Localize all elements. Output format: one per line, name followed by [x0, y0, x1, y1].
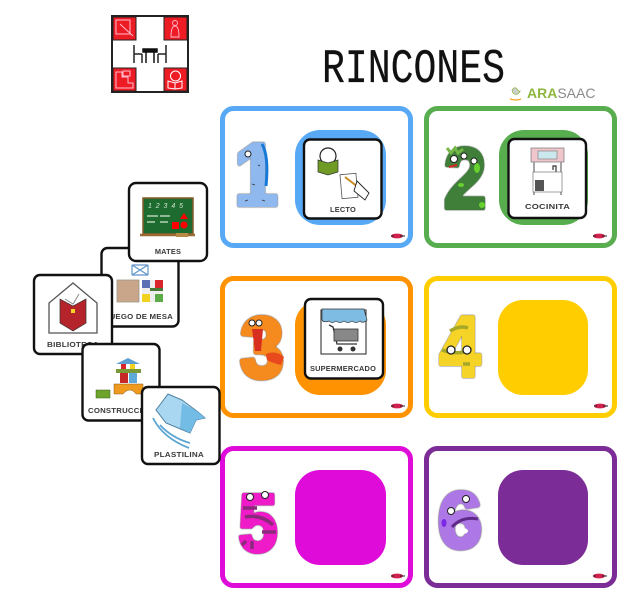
picto: mates: MATES: [155, 247, 181, 256]
picto: lecto: [304, 140, 382, 218]
logo: corner activity icons with table: [112, 16, 188, 92]
mini logo: [593, 574, 607, 578]
panel 6: purple: [426, 448, 614, 586]
title: RINCONES: [322, 43, 505, 97]
picto: juego de mesa: JUEGO DE MESA: [105, 312, 173, 321]
number 3 monster: 3: [240, 301, 284, 396]
panel 5: magenta: [222, 448, 410, 586]
picto: construccion: [82, 344, 160, 420]
picto: cocinita: COCINITA: [525, 202, 571, 211]
picto: plastilina: [142, 387, 220, 464]
mini logo: [391, 234, 405, 238]
picto: cocinita: [508, 139, 586, 218]
picto: juego de mesa: [102, 248, 178, 326]
number 2 monster: 2: [444, 132, 486, 227]
picto: lecto: LECTO: [330, 205, 356, 214]
panel 3: orange, Supermercado: [222, 278, 410, 416]
number 6 monster: 6: [438, 476, 482, 564]
mini logo: [391, 574, 405, 578]
mini logo: [593, 234, 607, 238]
number 5 monster: 5: [238, 478, 278, 569]
picto: supermercado: SUPERMERCADO: [310, 364, 376, 373]
picto: construccion: CONSTRUCCIÓN: [88, 406, 154, 415]
number 1 monster: 1: [234, 125, 278, 224]
panel 4: yellow: [426, 278, 614, 416]
picto: supermercado: [305, 299, 383, 378]
ARASAAC logo: ARASAAC: [527, 85, 595, 101]
picto: biblioteca: [34, 275, 112, 354]
mini logo: [594, 404, 608, 408]
panel 2: green, Cocinita: [426, 108, 614, 246]
picto: plastilina: PLASTILINA: [154, 450, 204, 459]
number 4 monster: 4: [440, 299, 480, 394]
mini logo: [391, 404, 405, 408]
picto: biblioteca: BIBLIOTECA: [47, 340, 100, 349]
picto: mates: [129, 183, 207, 261]
panel 1: blue, Lecto: [222, 108, 410, 246]
picto: mates: 1 2 3 4 5: [148, 203, 183, 210]
